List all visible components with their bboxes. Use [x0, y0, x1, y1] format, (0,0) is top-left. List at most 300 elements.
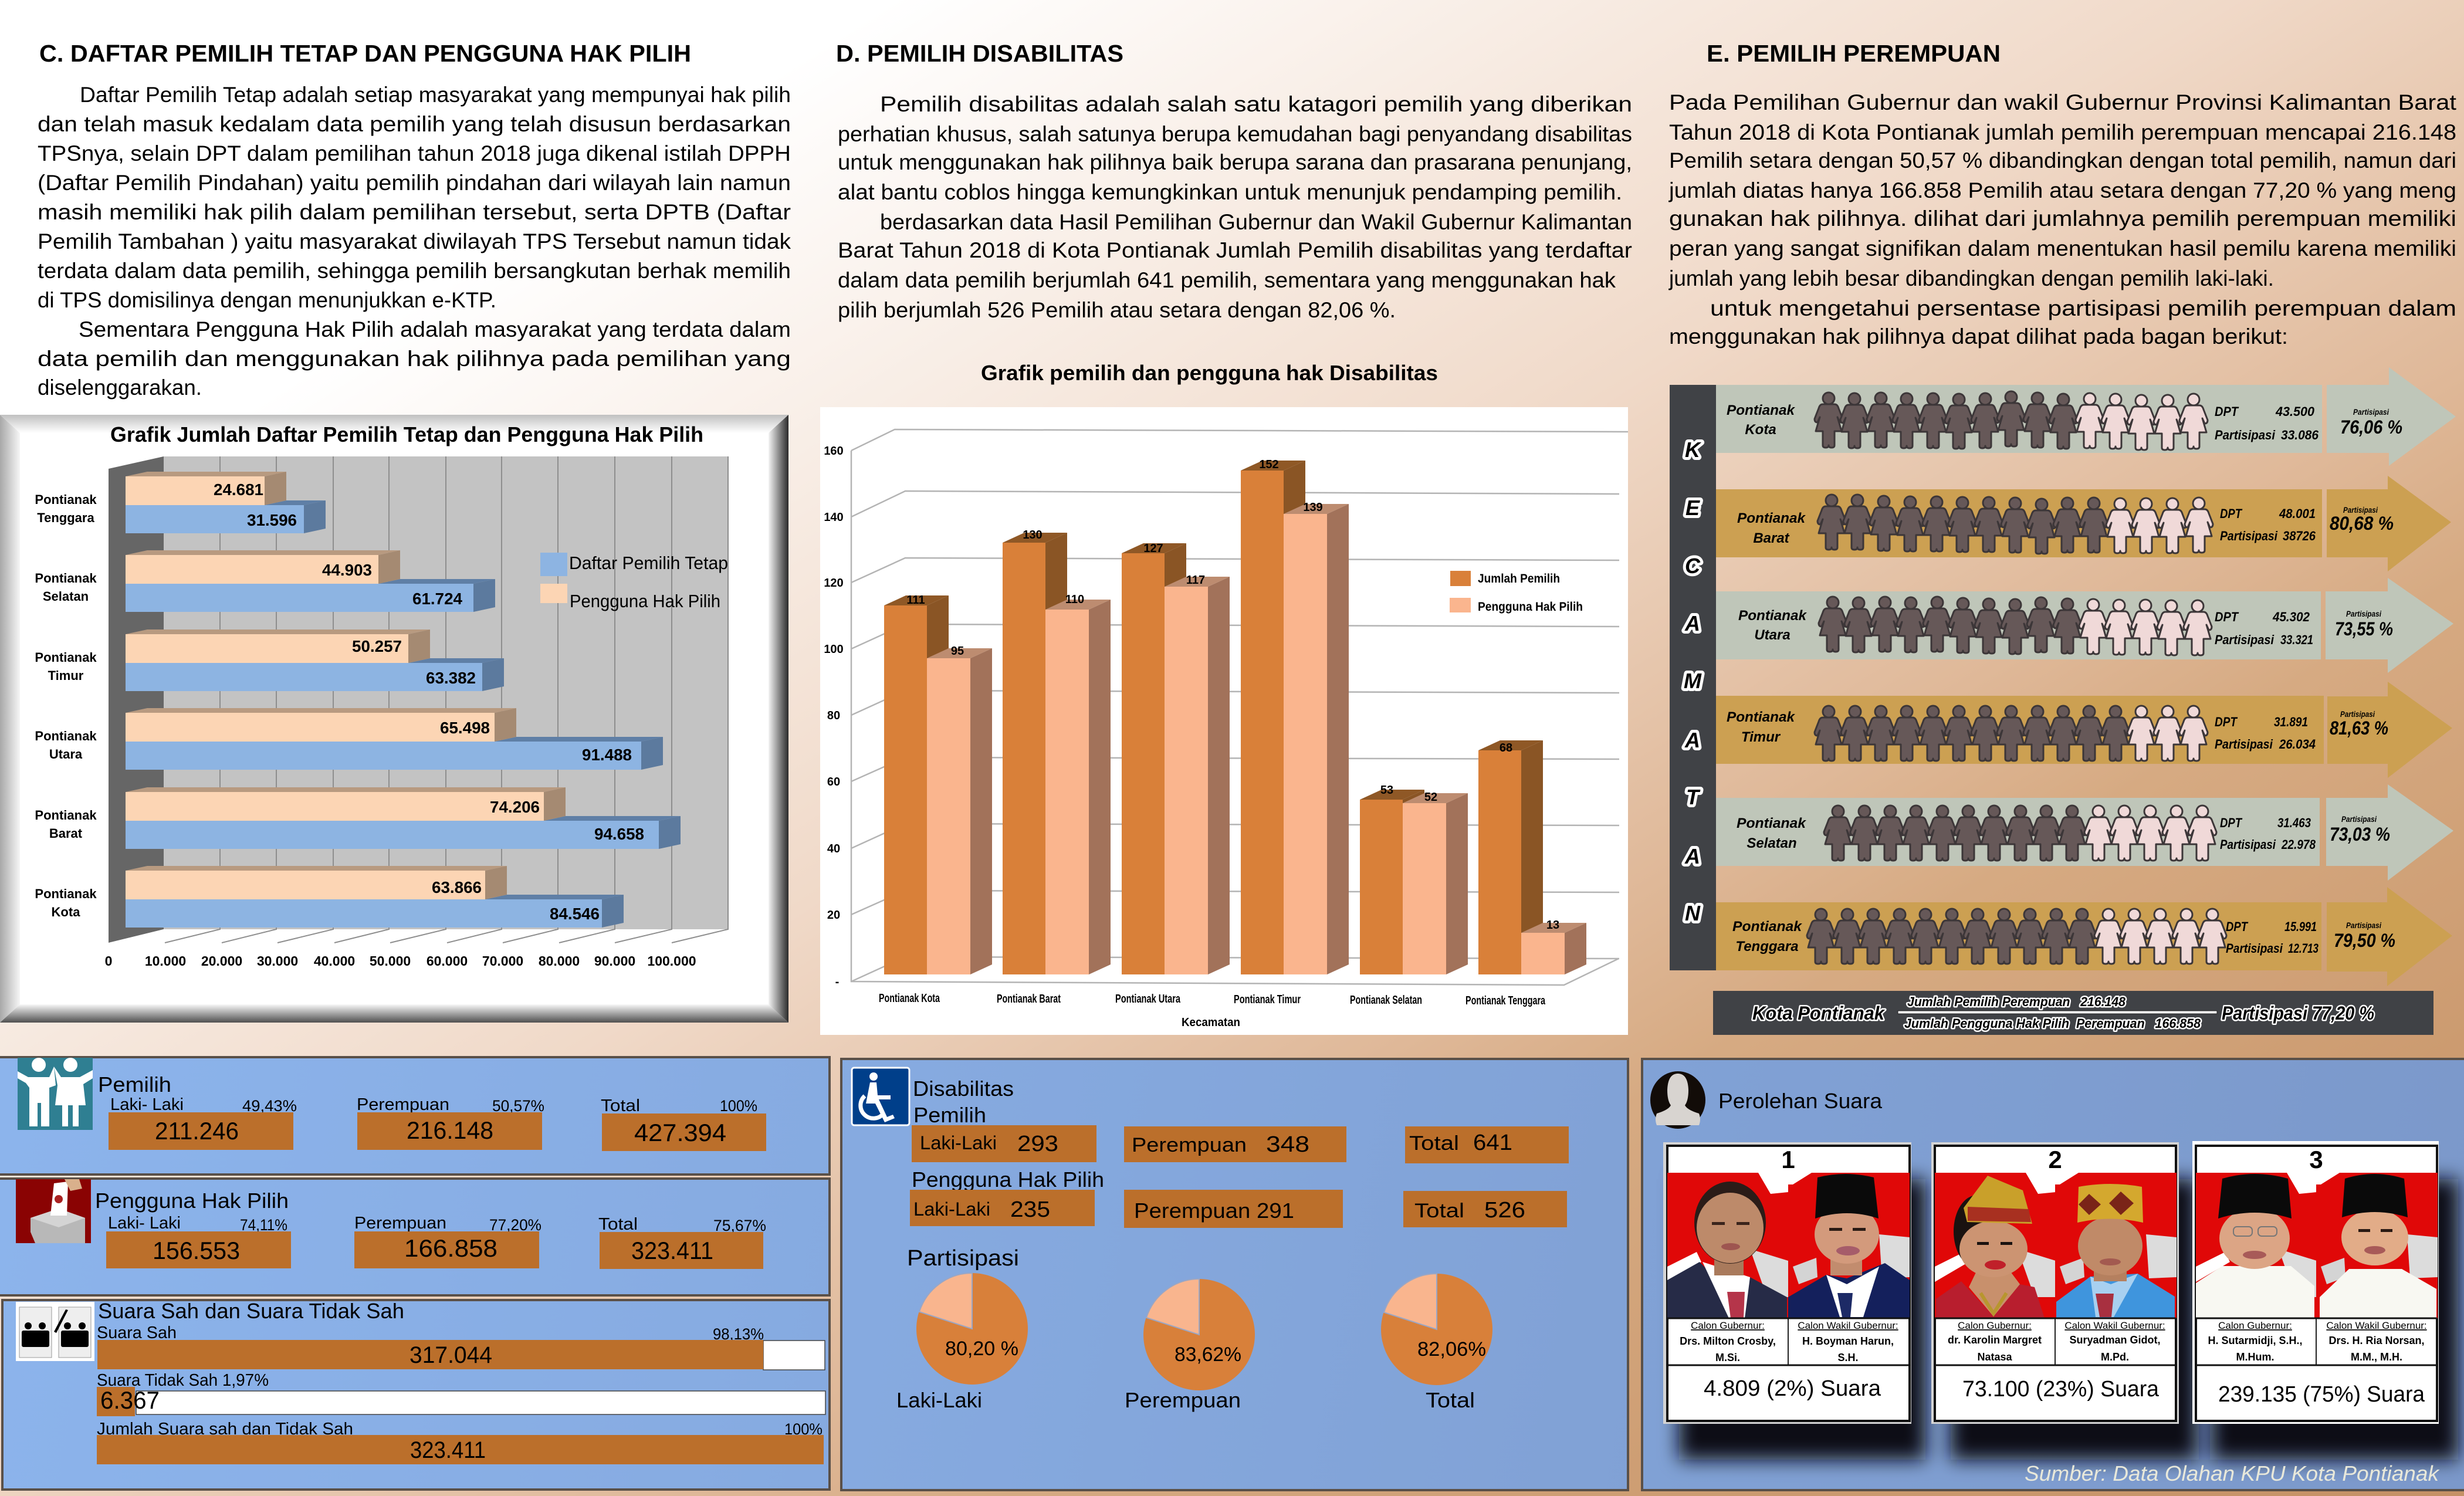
x axis labels: 30.000	[257, 953, 298, 969]
value labels: 127	[1143, 542, 1163, 555]
stat: Total: 75,67%	[713, 1217, 766, 1234]
value labels: 13	[1546, 919, 1559, 932]
candidate names: S.H.	[1837, 1352, 1859, 1363]
stat: Laki-Laki	[106, 1214, 291, 1268]
y axis labels: 40	[827, 842, 840, 855]
text block: section E: Pemilih setara dengan 50,57 % dibandingkan dengan total pemilih, namun dari	[1669, 148, 2456, 172]
row: Pontianak Selatan: 31.463	[2277, 815, 2311, 830]
bars: Pontianak Tenggara	[1478, 740, 1586, 974]
pie: Perempuan: Perempuan	[1125, 1388, 1241, 1412]
row: Pontianak Utara: Partisipasi	[2346, 609, 2382, 618]
row: Pontianak Tenggara: Pontianak	[1732, 919, 1803, 935]
text block: section D: untuk menggunakan hak pilihnya baik berupa sarana dan prasarana penunjang,	[838, 150, 1632, 174]
y axis labels: 140	[824, 511, 844, 524]
heading: Pengguna Hak Pilih: Pengguna Hak Pilih	[95, 1189, 289, 1213]
icon: wheelchair	[852, 1068, 909, 1125]
value labels: 110	[1065, 593, 1084, 606]
pie: Total	[1381, 1274, 1492, 1412]
stat: Laki-Laki 235: 235	[1010, 1197, 1050, 1222]
category labels	[879, 992, 1546, 1029]
category labels: Selatan	[43, 589, 89, 604]
bar: Suara Sah: Suara Sah	[97, 1324, 177, 1342]
photo: Sutarmidji	[2196, 1173, 2317, 1318]
row: Pontianak Utara: Utara	[1754, 627, 1791, 643]
panel: Perolehan Suara	[1642, 1059, 2464, 1490]
text block: section E: jumlah diatas hanya 166.858 Pemilih atau setara dengan 77,20 % yang meng	[1668, 178, 2456, 202]
text block: section C: diselenggarakan.	[38, 375, 202, 400]
text block: section E: Tahun 2018 di Kota Pontianak jumlah pemilih perempuan mencapai 216.148	[1669, 120, 2456, 144]
row: Pontianak Timur: Timur	[1741, 729, 1781, 745]
x axis labels	[105, 953, 696, 969]
bar value labels	[214, 480, 644, 923]
value labels	[906, 458, 1559, 932]
category labels: Utara	[49, 747, 83, 761]
bars: Pontianak Selatan	[1360, 790, 1468, 974]
candidate names: Calon Wakil Gubernur:	[2326, 1320, 2427, 1331]
text block: section C: Sementara Pengguna Hak Pilih adalah masyarakat yang terdata dalam	[79, 317, 791, 341]
row: Pontianak Selatan: DPT	[2220, 815, 2242, 830]
row: Pontianak Kota: 76,06 %	[2340, 417, 2402, 438]
bar value labels: 84.546	[550, 905, 600, 923]
value labels: 152	[1259, 458, 1279, 471]
heading: section C: C. DAFTAR PEMILIH TETAP DAN PENGGUNA HAK PILIH	[39, 40, 691, 67]
heading: Pengguna Hak Pilih: Pengguna Hak Pilih	[912, 1167, 1104, 1192]
kecamatan column: K	[1685, 438, 1702, 462]
category labels: Pontianak Tenggara	[1465, 994, 1546, 1007]
icon: ballot papers	[16, 1302, 94, 1361]
y axis labels: 20	[827, 909, 840, 922]
stat: Perempuan: 166.858	[404, 1234, 497, 1262]
bars: Pontianak Barat	[126, 787, 681, 849]
y axis labels: 160	[824, 445, 844, 458]
y axis labels	[824, 445, 844, 989]
heading: section E: E. PEMILIH PEREMPUAN	[1707, 40, 2001, 67]
category labels: Pontianak	[35, 571, 97, 585]
row: Pontianak Kota: Partisipasi	[2353, 407, 2389, 417]
x axis labels: 40.000	[314, 953, 355, 969]
pie: Laki-Laki: 80,20 %	[945, 1338, 1018, 1360]
stat: Perempuan: Perempuan	[357, 1095, 449, 1114]
stat: Perempuan	[354, 1214, 541, 1268]
x axis labels: 90.000	[594, 953, 635, 969]
bars: Pontianak Tenggara	[126, 472, 326, 533]
legend	[540, 553, 728, 611]
category labels	[35, 492, 97, 919]
row: Pontianak Timur: Pontianak	[1727, 709, 1796, 725]
candidate card 2	[1931, 1142, 2179, 1424]
text block: section C: data pemilih dan menggunakan hak pilihnya pada pemilihan yang	[38, 347, 791, 371]
row: Pontianak Kota: DPT	[2215, 404, 2239, 419]
row: Pontianak Timur: 81,63 %	[2330, 717, 2388, 739]
text block: section C: (Daftar Pemilih Pindahan) yaitu pemilih pindahan dari wilayah lain namun	[38, 171, 791, 195]
legend: Pengguna Hak Pilih	[570, 591, 720, 611]
stat: Total 641	[1405, 1126, 1569, 1163]
category labels: Barat	[49, 826, 83, 841]
row: Pontianak Utara: DPT	[2215, 610, 2239, 624]
row: Pontianak Kota: 43.500	[2275, 404, 2315, 419]
stat: Laki-Laki: Laki- Laki	[110, 1095, 184, 1114]
bar value labels: 94.658	[594, 825, 644, 843]
heading: Disabilitas Pemilih	[913, 1077, 1014, 1127]
icon: ballot box	[16, 1179, 91, 1243]
text block: section C: di TPS domisilinya dengan menunjukkan e-KTP.	[38, 288, 496, 312]
stat: Total: 100%	[720, 1097, 757, 1115]
candidate names: Drs. H. Ria Norsan,	[2328, 1335, 2425, 1346]
candidate names: Calon Wakil Gubernur:	[1798, 1320, 1898, 1331]
stat: Perempuan 348: 348	[1266, 1132, 1309, 1157]
text block: section C: Daftar Pemilih Tetap adalah setiap masyarakat yang mempunyai hak pilih	[80, 83, 791, 107]
chart panel: Daftar Pemilih Tetap dan Pengguna Hak Pilih	[0, 415, 788, 1023]
text block: section C: terdata dalam data pemilih, sehingga pemilih bersangkutan berhak memilih	[38, 259, 791, 283]
row: Pontianak Kota	[1716, 367, 2456, 466]
x axis labels: 10.000	[145, 953, 186, 969]
text block: section D: Pemilih disabilitas adalah salah satu katagori pemilih yang diberikan	[880, 92, 1632, 116]
row: Pontianak Utara: Partisipasi	[2215, 632, 2275, 647]
category labels: Pontianak Kota	[879, 992, 940, 1005]
bar value labels: 63.382	[426, 669, 476, 687]
x axis labels: 60.000	[427, 953, 468, 969]
kecamatan column	[1670, 385, 1716, 970]
bar: Suara Sah: 317.044	[409, 1342, 492, 1368]
row: Pontianak Kota: 33.086	[2281, 428, 2319, 442]
panel: Pengguna Hak Pilih	[0, 1179, 830, 1295]
pie: Total: Total	[1426, 1388, 1475, 1412]
y axis labels: 100	[824, 643, 844, 656]
bar value labels: 63.866	[432, 878, 482, 896]
text block: section E: untuk mengetahui persentase partisipasi pemilih perempuan dalam	[1710, 296, 2456, 320]
heading: Disabilitas Pemilih: Pemilih	[913, 1103, 986, 1127]
panel: Disabilitas	[841, 1059, 1628, 1490]
stat: Perempuan: 216.148	[407, 1116, 493, 1144]
y axis labels: -	[835, 976, 839, 989]
text block: section D: dalam data pemilih berjumlah 641 pemilih, sementara yang menggunakan hak	[838, 268, 1616, 292]
chart panel: pemilih dan pengguna hak disabilitas	[820, 407, 1628, 1035]
text block: section C: Pemilih Tambahan ) yaitu masyarakat diwilayah TPS Tersebut namun tidak	[38, 229, 791, 253]
kecamatan column: T	[1686, 785, 1701, 809]
stat: Total	[598, 1215, 766, 1269]
legend: Daftar Pemilih Tetap	[569, 553, 728, 573]
stat: Laki-Laki: Laki- Laki	[108, 1214, 181, 1233]
text block: section D	[838, 92, 1632, 322]
row: Pontianak Kota: Pontianak	[1727, 402, 1796, 418]
stat: Laki-Laki: 156.553	[153, 1237, 240, 1264]
stat: Total 526	[1403, 1191, 1567, 1227]
row: Pontianak Barat: Partisipasi	[2343, 505, 2378, 515]
bar value labels: 74.206	[490, 798, 540, 816]
stat: Laki-Laki: 211.246	[155, 1117, 239, 1145]
row: Pontianak Timur: Partisipasi	[2340, 709, 2375, 719]
stat: Laki-Laki: 49,43%	[242, 1097, 297, 1115]
category labels: Kota	[52, 905, 80, 919]
pie: Perempuan	[1125, 1279, 1255, 1412]
candidate names: Calon Wakil Gubernur:	[2064, 1320, 2165, 1331]
photo: Karolin Margret Natasa	[1935, 1173, 2056, 1318]
stat: Total	[601, 1096, 766, 1151]
stat: Laki-Laki 235	[910, 1190, 1095, 1226]
text block: section E: peran yang sangat signifikan dalam menentukan hasil pemilu karena memiliki	[1669, 236, 2456, 260]
row: Pontianak Timur: 31.891	[2274, 715, 2308, 729]
candidate names: M.Pd.	[2101, 1351, 2129, 1363]
pie: Total: 82,06%	[1417, 1338, 1486, 1360]
vote count: 4.809 (2%) Suara	[1704, 1376, 1881, 1401]
heading: section D: D. PEMILIH DISABILITAS	[836, 40, 1123, 67]
infographic: pemilih perempuan per kecamatan	[1670, 367, 2456, 1035]
text block: section E: gunakan hak pilihnya. dilihat dari jumlahnya pemilih perempuan memiliki	[1669, 207, 2456, 231]
source note: Sumber: Data Olahan KPU Kota Pontianak	[2025, 1461, 2440, 1485]
bar value labels: 61.724	[412, 590, 462, 608]
kecamatan column: N	[1685, 901, 1701, 925]
stat: Total 526: 526	[1484, 1198, 1525, 1223]
x axis labels: 0	[105, 953, 112, 969]
x axis labels: 70.000	[482, 953, 523, 969]
candidate names: dr. Karolin Margret	[1948, 1334, 2042, 1346]
row: Pontianak Utara	[1716, 578, 2453, 673]
row: Pontianak Tenggara: DPT	[2226, 919, 2248, 934]
chart title: Grafik Jumlah Daftar Pemilih Tetap dan Pengguna Hak Pilih	[110, 422, 703, 446]
candidate card 3	[2192, 1141, 2439, 1424]
bar: Suara Tidak Sah: Suara Tidak Sah 1,97%	[97, 1371, 269, 1390]
candidate names: Drs. Milton Crosby,	[1680, 1335, 1776, 1347]
bar value labels: 24.681	[214, 480, 263, 499]
bar value labels: 50.257	[352, 637, 402, 655]
stat: Total: Total	[598, 1215, 638, 1234]
text block: section D: alat bantu coblos hingga kemungkinkan untuk menunjuk pendamping pemilih.	[838, 180, 1622, 204]
summary bar: Kota Pontianak: Kota Pontianak	[1752, 1003, 1886, 1024]
summary bar: Kota Pontianak: Jumlah Pengguna Hak Pilih Perempuan 166.858	[1904, 1016, 2201, 1031]
stat: Total 641: Total	[1409, 1132, 1459, 1155]
candidate card 1	[1663, 1142, 1911, 1424]
candidate names: M.Hum.	[2236, 1351, 2274, 1363]
bar: Suara Sah	[97, 1324, 825, 1370]
icon: candidate silhouette	[1650, 1071, 1705, 1129]
stat: Total: 323.411	[631, 1237, 713, 1264]
row: Pontianak Kota: Partisipasi	[2215, 428, 2276, 442]
value labels: 53	[1380, 784, 1393, 797]
row: Pontianak Barat: Barat	[1753, 530, 1790, 546]
candidate names: Calon Gubernur:	[2218, 1320, 2292, 1331]
stat: Perempuan 291	[1124, 1190, 1343, 1228]
row: Pontianak Tenggara: Partisipasi	[2226, 941, 2283, 956]
row: Pontianak Selatan: Selatan	[1747, 835, 1797, 851]
value labels: 95	[951, 645, 964, 658]
bar value labels: 91.488	[582, 746, 632, 764]
row: Pontianak Selatan: Partisipasi	[2341, 814, 2377, 824]
heading: Disabilitas Pemilih: Disabilitas	[913, 1077, 1014, 1101]
value labels: 68	[1500, 742, 1512, 754]
row: Pontianak Barat: Pontianak	[1737, 510, 1806, 526]
category labels: Timur	[48, 668, 84, 683]
candidate names: M.Si.	[1715, 1352, 1740, 1363]
category labels: Pontianak	[35, 650, 97, 665]
candidate names: H. Sutarmidji, S.H.,	[2208, 1335, 2303, 1346]
y axis labels: 60	[827, 776, 840, 788]
row: Pontianak Barat: 38726	[2283, 529, 2316, 543]
candidate names	[1935, 1318, 2176, 1365]
kecamatan column: E	[1685, 496, 1700, 520]
kecamatan column: A	[1684, 844, 1700, 868]
x axis labels: 20.000	[201, 953, 242, 969]
bars: Pontianak Timur	[1241, 461, 1349, 974]
stat: Total 641: 641	[1473, 1131, 1512, 1155]
row: Pontianak Selatan: 73,03 %	[2330, 824, 2390, 845]
stat: Total 526: Total	[1414, 1200, 1464, 1222]
x axis labels: 80.000	[539, 953, 580, 969]
ballot number: 2	[2048, 1146, 2062, 1173]
text block: section D: Barat Tahun 2018 di Kota Pontianak Jumlah Pemilih disabilitas yang terdaftar	[838, 238, 1632, 262]
row: Pontianak Selatan: 22.978	[2281, 837, 2316, 852]
text block: section C: masih memiliki hak pilih dalam pemilihan tersebut, serta DPTB (Daftar	[38, 200, 791, 224]
candidate names: Suryadman Gidot,	[2069, 1334, 2161, 1346]
category labels: Pontianak Timur	[1234, 993, 1301, 1006]
text block: section C: dan telah masuk kedalam data pemilih yang telah disusun berdasarkan	[38, 112, 791, 136]
text block: section C: TPSnya, selain DPT dalam pemilihan tahun 2018 juga dikenal istilah DPPH	[38, 141, 791, 165]
row: Pontianak Utara: 73,55 %	[2335, 618, 2393, 639]
stat: Laki-Laki: 74,11%	[240, 1216, 287, 1234]
row: Pontianak Timur: 26.034	[2279, 737, 2316, 752]
bar: Jumlah Suara: Jumlah Suara sah dan Tidak Sah	[97, 1420, 353, 1439]
x axis labels: 50.000	[370, 953, 411, 969]
frame	[0, 415, 788, 1023]
stat: Perempuan	[357, 1095, 544, 1150]
stat: Total: 427.394	[634, 1119, 726, 1146]
heading: Pemilih: Pemilih	[98, 1072, 171, 1096]
bar value labels: 65.498	[440, 719, 490, 737]
row: Pontianak Timur: Partisipasi	[2215, 737, 2273, 752]
value labels: 139	[1303, 501, 1323, 514]
row: Pontianak Selatan: Partisipasi	[2220, 837, 2276, 852]
bar: Jumlah Suara: 100%	[784, 1420, 823, 1438]
grid	[851, 429, 1628, 985]
stat: Laki-Laki 293	[912, 1125, 1096, 1162]
stat: Laki-Laki 293: 293	[1017, 1132, 1058, 1156]
kecamatan column: M	[1684, 669, 1702, 693]
row: Pontianak Utara: 45.302	[2272, 610, 2310, 624]
bars: Pontianak Timur	[126, 629, 504, 691]
bars: Pontianak Kota	[126, 866, 624, 928]
summary bar: Kota Pontianak: Partisipasi 77,20 %	[2222, 1003, 2374, 1024]
pie: Laki-Laki: Laki-Laki	[896, 1388, 982, 1412]
category labels: Pontianak	[35, 492, 97, 507]
y axis labels: 80	[827, 709, 840, 722]
stat: Perempuan 291: Perempuan 291	[1134, 1199, 1294, 1223]
heading: Suara Sah dan Suara Tidak Sah	[98, 1299, 404, 1323]
kecamatan column: C	[1685, 554, 1701, 578]
photo: Ria Norsan	[2316, 1173, 2438, 1318]
category labels: Pontianak	[35, 729, 97, 743]
row: Pontianak Selatan: Pontianak	[1737, 815, 1807, 831]
x axis labels: 100.000	[647, 953, 696, 969]
stat: Perempuan: Perempuan	[354, 1214, 446, 1233]
kecamatan column: A	[1684, 611, 1700, 635]
row: Pontianak Tenggara: Tenggara	[1735, 939, 1799, 955]
row: Pontianak Utara: Pontianak	[1738, 608, 1808, 624]
bars: Pontianak Utara	[1122, 543, 1230, 974]
legend	[1450, 571, 1583, 614]
vote count: 239.135 (75%) Suara	[2218, 1382, 2425, 1407]
text block: section E	[1668, 90, 2457, 348]
heading: disability chart title: Grafik pemilih dan pengguna hak Disabilitas	[981, 361, 1438, 385]
summary bar: Kota Pontianak: Jumlah Pemilih Perempuan 216.148	[1907, 994, 2126, 1009]
kecamatan column: A	[1684, 728, 1700, 752]
text block: section E: menggunakan hak pilihnya dapat dilihat pada bagan berikut:	[1669, 324, 2288, 348]
bar: Suara Tidak Sah	[97, 1371, 825, 1416]
photo: Suryadman Gidot	[2055, 1173, 2177, 1318]
stat: Perempuan: 50,57%	[492, 1097, 544, 1115]
text block: section E: Pada Pemilihan Gubernur dan wakil Gubernur Provinsi Kalimantan Barat	[1669, 90, 2457, 114]
row: Pontianak Barat: 48.001	[2279, 506, 2316, 521]
stat: Laki-Laki 235: Laki-Laki	[913, 1199, 990, 1220]
stat: Perempuan 348: Perempuan	[1132, 1134, 1247, 1156]
stat: Total: Total	[601, 1096, 640, 1115]
card shadows	[1679, 1179, 2458, 1460]
plot walls and grid	[109, 456, 728, 943]
panel: Pemilih	[0, 1057, 830, 1175]
stat: Perempuan: 77,20%	[489, 1216, 541, 1234]
candidate names: M.M., M.H.	[2351, 1351, 2402, 1363]
bars: Pontianak Kota	[884, 595, 992, 974]
ballot number: 3	[2309, 1146, 2323, 1173]
text block: section E: jumlah yang lebih besar dibandingkan dengan pemilih laki-laki.	[1668, 266, 2274, 290]
value labels: 130	[1023, 529, 1043, 541]
bars: Pontianak Barat	[1003, 533, 1111, 974]
ballot number: 1	[1781, 1146, 1795, 1173]
candidate names: H. Boyman Harun,	[1802, 1335, 1894, 1347]
row: Pontianak Barat	[1716, 476, 2451, 571]
bars: Pontianak Utara	[126, 708, 663, 770]
row: Pontianak Timur	[1716, 682, 2452, 778]
bar: Jumlah Suara: 323.411	[410, 1437, 486, 1463]
heading: Perolehan Suara: Perolehan Suara	[1718, 1089, 1883, 1113]
category labels: Pontianak Utara	[1115, 993, 1181, 1006]
bar: Jumlah Suara	[97, 1420, 824, 1464]
summary bar: Kota Pontianak	[1713, 991, 2433, 1035]
y axis labels: 120	[824, 577, 844, 590]
pie: Laki-Laki	[896, 1273, 1028, 1412]
row: Pontianak Tenggara	[1716, 887, 2452, 986]
legend: Jumlah Pemilih	[1478, 572, 1560, 585]
text block: section D: berdasarkan data Hasil Pemilihan Gubernur dan Wakil Gubernur Kalimantan	[880, 210, 1632, 234]
stat: Perempuan 348	[1124, 1126, 1346, 1162]
row: Pontianak Barat: 80,68 %	[2330, 513, 2394, 534]
bar value labels: 31.596	[247, 511, 297, 529]
row: Pontianak Utara: 33.321	[2280, 632, 2313, 647]
value labels: 117	[1186, 574, 1205, 587]
icon: voters	[18, 1058, 93, 1130]
category labels: Pontianak	[35, 808, 97, 823]
heading: Partisipasi: Partisipasi	[907, 1246, 1019, 1271]
panel: Suara Sah dan Suara Tidak Sah	[2, 1299, 830, 1490]
stat: Laki-Laki 293: Laki-Laki	[920, 1132, 997, 1153]
row: Pontianak Kota: Kota	[1745, 422, 1776, 438]
pie: Perempuan: 83,62%	[1175, 1343, 1241, 1366]
value labels: 52	[1424, 791, 1437, 804]
row: Pontianak Barat: Partisipasi	[2220, 529, 2278, 543]
candidate names	[1667, 1318, 1910, 1365]
category labels: Tenggara	[37, 510, 94, 525]
row: Pontianak Timur: DPT	[2215, 715, 2238, 729]
candidate names: Calon Gubernur:	[1958, 1320, 2032, 1331]
photo: Boyman Harun	[1788, 1173, 1910, 1318]
stat: Laki-Laki	[109, 1095, 297, 1150]
category labels: Pontianak	[35, 886, 97, 901]
category labels: Kecamatan	[1182, 1016, 1240, 1029]
candidate names: Calon Gubernur:	[1691, 1320, 1765, 1331]
photo: Milton Crosby	[1667, 1173, 1788, 1318]
legend: Pengguna Hak Pilih	[1478, 600, 1583, 614]
text block: section D: pilih berjumlah 526 Pemilih atau setara dengan 82,06 %.	[838, 298, 1396, 322]
category labels: Pontianak Barat	[997, 993, 1061, 1006]
candidate names	[2196, 1318, 2437, 1365]
